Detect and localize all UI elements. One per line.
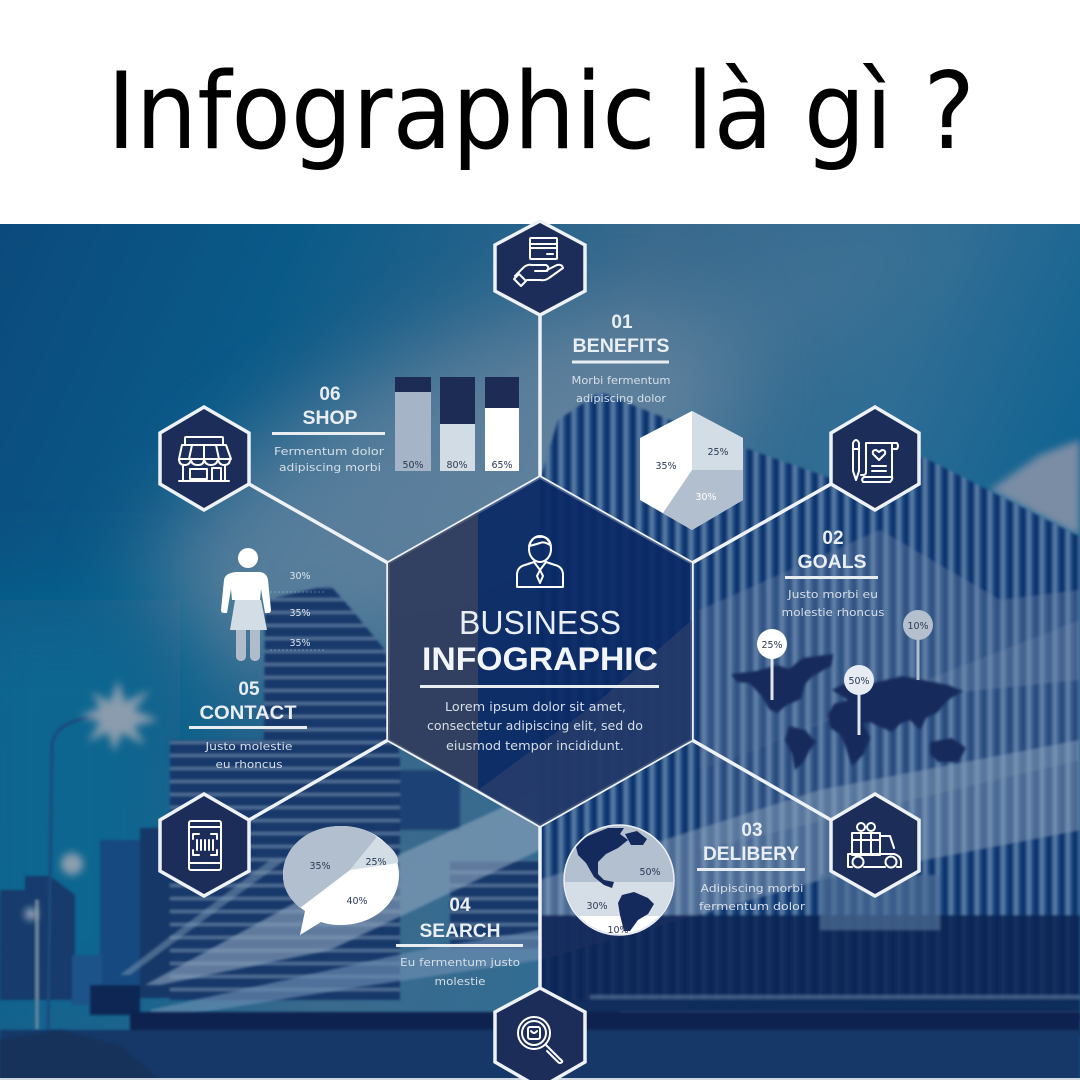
icon: document and pen hexagon: [831, 407, 919, 510]
speech bubble pie chart: [283, 826, 399, 935]
pin 25%: 25%: [761, 640, 783, 651]
central description: eiusmod tempor incididunt.: [446, 739, 624, 753]
globe pie chart: [560, 825, 680, 941]
connector lines between hexagons: [249, 315, 831, 988]
bar chart: shop: 50%: [402, 460, 424, 471]
globe pie chart: 50%: [639, 867, 661, 878]
bar chart: shop: [395, 377, 519, 471]
section 01 benefits: adipiscing dolor: [576, 393, 667, 405]
central description: Lorem ipsum dolor sit amet,: [445, 700, 626, 714]
world map with pins: [732, 610, 966, 770]
bar chart: shop: 65%: [491, 460, 513, 471]
section 02 goals: molestie rhoncus: [782, 607, 884, 619]
heading: business infographic: BUSINESS: [459, 604, 621, 641]
section 06 shop: [272, 384, 385, 474]
right building: [540, 392, 1080, 1020]
section 01 benefits: Morbi fermentum: [572, 375, 670, 387]
icon: top hexagon with card and hand: [495, 221, 585, 315]
title: Infographic là gì ?: [107, 50, 975, 173]
icon: truck hexagon: [831, 794, 919, 896]
section 01 benefits: [572, 312, 670, 405]
street lamp glare: [25, 680, 158, 920]
globe pie chart: 10%: [607, 925, 629, 936]
section 03 delibery: DELIBERY: [703, 844, 799, 865]
section 05 contact: eu rhoncus: [216, 759, 282, 771]
section 03 delibery: Adipiscing morbi: [700, 883, 804, 895]
section 03 delibery: 03: [741, 820, 763, 841]
person pictogram chart: 35%: [289, 638, 311, 649]
speech bubble pie chart: 35%: [309, 861, 331, 872]
section 06 shop: 06: [319, 384, 341, 405]
section 06 shop: adipiscing morbi: [279, 462, 381, 474]
speech bubble pie chart: 40%: [346, 896, 368, 907]
section 03 delibery: fermentum dolor: [699, 901, 806, 913]
person pictogram chart: 30%: [289, 571, 311, 582]
panel: central hexagon: [388, 477, 692, 826]
light trails: [120, 806, 538, 1013]
section 01 benefits: 01: [611, 312, 633, 333]
person pictogram chart: 35%: [289, 608, 311, 619]
section 04 search: [396, 895, 523, 988]
section 05 contact: 05: [238, 679, 260, 700]
person pictogram chart: [221, 548, 325, 661]
section 05 contact: [189, 679, 307, 771]
bar chart: shop: 80%: [446, 460, 468, 471]
pin 50%: [844, 665, 874, 735]
section 06 shop: Fermentum dolor: [274, 446, 385, 458]
central description: [427, 700, 643, 753]
section 02 goals: [782, 528, 884, 619]
hexagon pie chart: 30%: [695, 492, 717, 503]
section 04 search: molestie: [434, 976, 486, 988]
section 02 goals: Justo morbi eu: [787, 589, 878, 601]
pin 25%: [757, 629, 787, 700]
section 03 delibery: [697, 820, 806, 913]
light bloom in sky, right: [990, 440, 1080, 537]
pin 10%: [903, 610, 933, 680]
section 06 shop: SHOP: [302, 408, 358, 429]
icon: business person: [517, 536, 563, 587]
road: [130, 1012, 1080, 1036]
hexagon pie chart: 25%: [707, 447, 729, 458]
heading: infographic: INFOGRAPHIC: [422, 641, 658, 677]
hexagon pie chart: [640, 411, 743, 530]
section 02 goals: GOALS: [798, 552, 866, 573]
section 05 contact: CONTACT: [200, 703, 297, 724]
speech bubble pie chart: 25%: [365, 857, 387, 868]
globe pie chart: 30%: [586, 901, 608, 912]
icon: shop hexagon: [160, 407, 249, 510]
section 04 search: Eu fermentum justo: [400, 957, 520, 969]
section 04 search: SEARCH: [420, 921, 500, 942]
icon: magnifier hexagon: [495, 988, 585, 1080]
section 04 search: 04: [449, 895, 471, 916]
pin 50%: 50%: [848, 676, 870, 687]
section 02 goals: 02: [822, 528, 844, 549]
hexagon pie chart: 35%: [655, 461, 677, 472]
pin 10%: 10%: [907, 621, 929, 632]
left towers: [0, 585, 540, 1035]
icon: phone scanner hexagon: [160, 794, 249, 896]
section 05 contact: Justo molestie: [204, 741, 292, 753]
section 01 benefits: BENEFITS: [572, 336, 670, 357]
central description: consectetur adipiscing elit, sed do: [427, 719, 643, 733]
